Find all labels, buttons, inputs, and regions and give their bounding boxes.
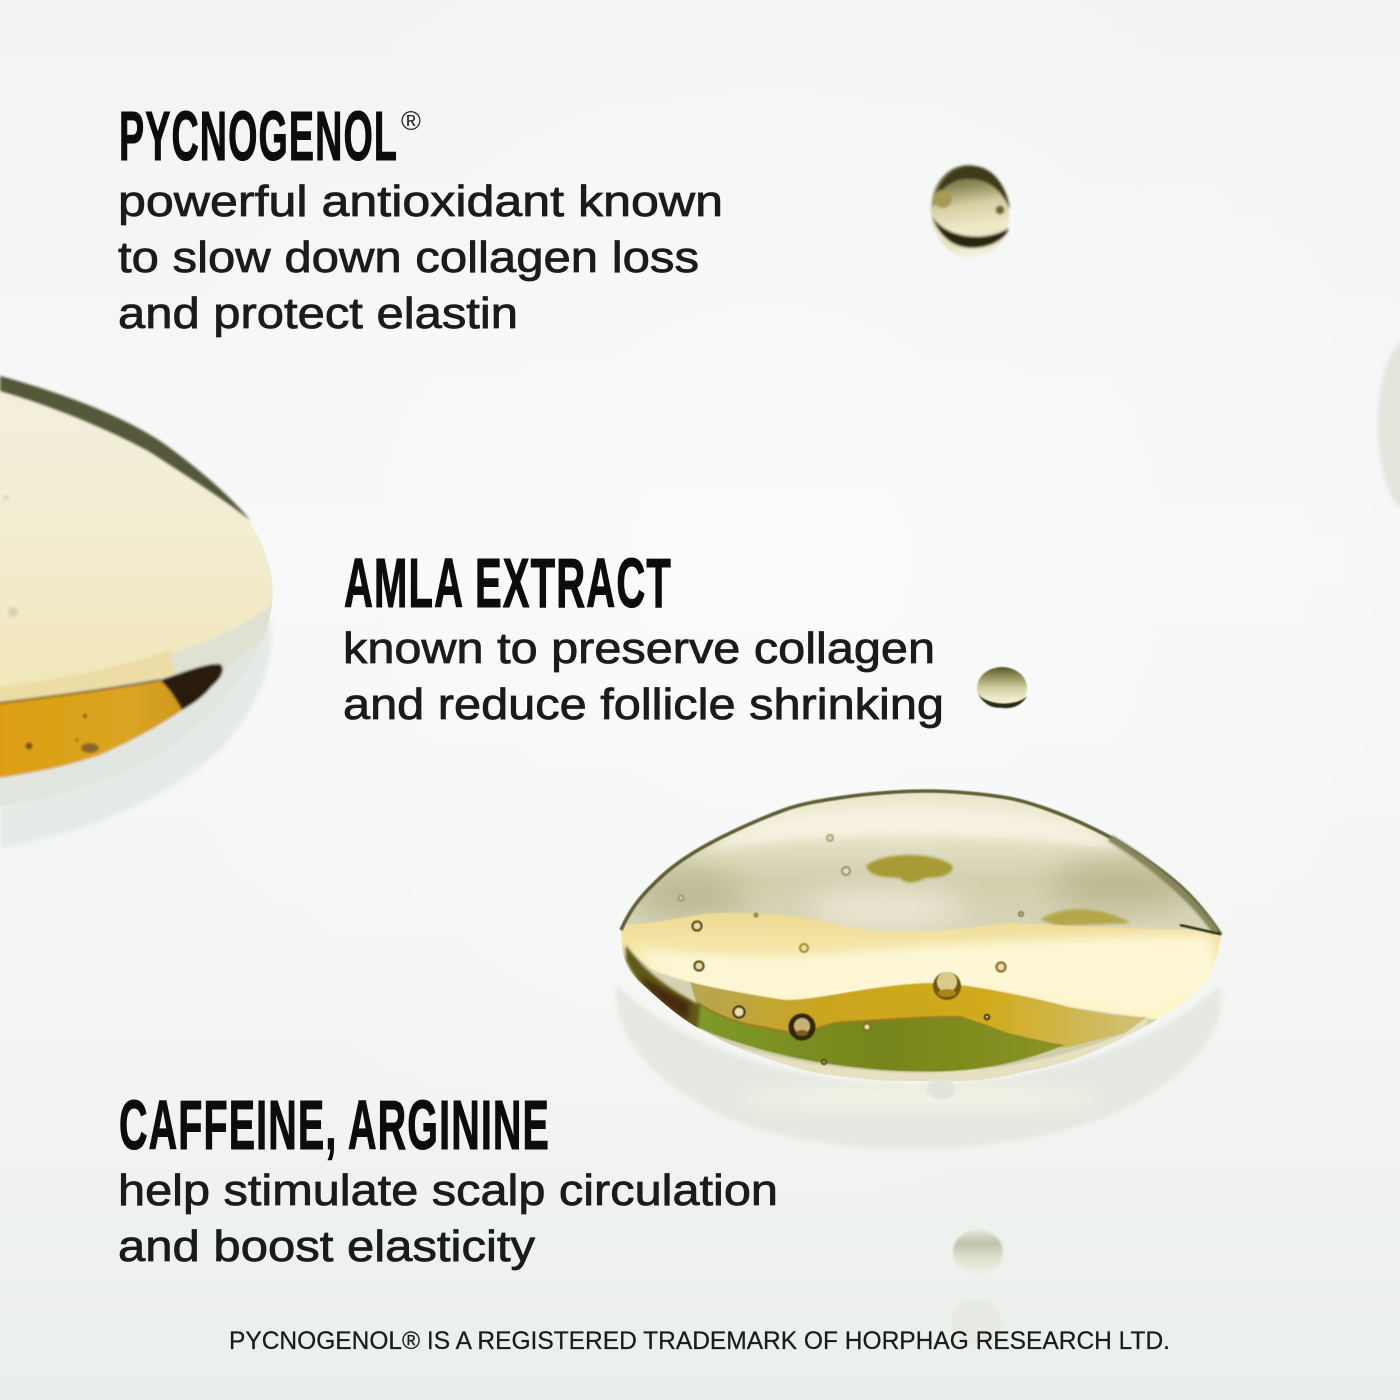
droplet: faint right edge: [1378, 340, 1400, 510]
droplet: small middle right: [977, 667, 1027, 709]
big droplet dark left corner: [626, 945, 700, 1032]
heading: Caffeine, Arginine: CAFFEINE, ARGININE: [119, 1086, 550, 1164]
big droplet pale under-glow: [740, 1084, 1100, 1112]
droplet: faint lower right: [951, 1230, 1003, 1344]
big droplet side grey zones: [635, 870, 745, 920]
big droplet green pool: [698, 1003, 1065, 1072]
big droplet upper highlight: [710, 807, 1120, 850]
description: Pycnogenol: and protect elastin: [118, 289, 518, 338]
left droplet grey lower band: [119, 604, 272, 686]
big droplet large bubbles: [788, 972, 961, 1040]
big droplet bright band: [620, 913, 1225, 1020]
big droplet top dome: [610, 785, 1230, 1085]
description: Amla Extract: known to preserve collagen: [343, 624, 935, 673]
left droplet body: [0, 378, 273, 688]
description: Caffeine, Arginine: help stimulate scalp circulation: [118, 1166, 778, 1215]
left droplet pale rim below the gold: [0, 640, 262, 806]
big droplet lower pale rim: [731, 1018, 1147, 1081]
footnote: trademark: PYCNOGENOL® IS A REGISTERED TRADEMARK OF HORPHAG RESEARCH LTD.: [229, 1327, 1170, 1355]
left droplet dark shadow edge: [160, 664, 223, 710]
description: Pycnogenol: to slow down collagen loss: [118, 233, 699, 282]
droplet: large centre: [610, 785, 1230, 1149]
droplet: small top right: [925, 160, 1015, 264]
left droplet dark top rim: [0, 376, 251, 521]
registered mark: ®: [401, 106, 421, 136]
left droplet shadow: [0, 620, 271, 848]
description: Caffeine, Arginine: and boost elasticity: [118, 1222, 535, 1271]
description: Pycnogenol: [118, 177, 723, 338]
big droplet olive reflection: [866, 855, 953, 882]
big droplet shadow: [616, 985, 1222, 1149]
big droplet gold band: [690, 982, 1147, 1048]
droplet: large left, cropped by page edge: [0, 370, 290, 848]
text block: Pycnogenol: [118, 97, 723, 338]
heading: Amla Extract: AMLA EXTRACT: [344, 544, 672, 622]
left droplet specks: [3, 495, 99, 753]
big droplet central glow: [805, 888, 965, 928]
description: Amla Extract: and reduce follicle shrinking: [343, 680, 944, 729]
big droplet reflection under edge: [927, 1079, 955, 1099]
big droplet dark top rim: [621, 791, 1221, 935]
description: Caffeine, Arginine: [118, 1166, 778, 1271]
text block: Caffeine, Arginine: [118, 1086, 778, 1271]
description: Pycnogenol: powerful antioxidant known: [118, 177, 723, 226]
text block: Amla Extract: [343, 544, 944, 729]
big droplet small bubbles: [678, 835, 1023, 1064]
description: Amla Extract: [343, 624, 944, 729]
heading: Pycnogenol: PYCNOGENOL: [119, 97, 398, 175]
left droplet gold pool: [0, 664, 223, 779]
